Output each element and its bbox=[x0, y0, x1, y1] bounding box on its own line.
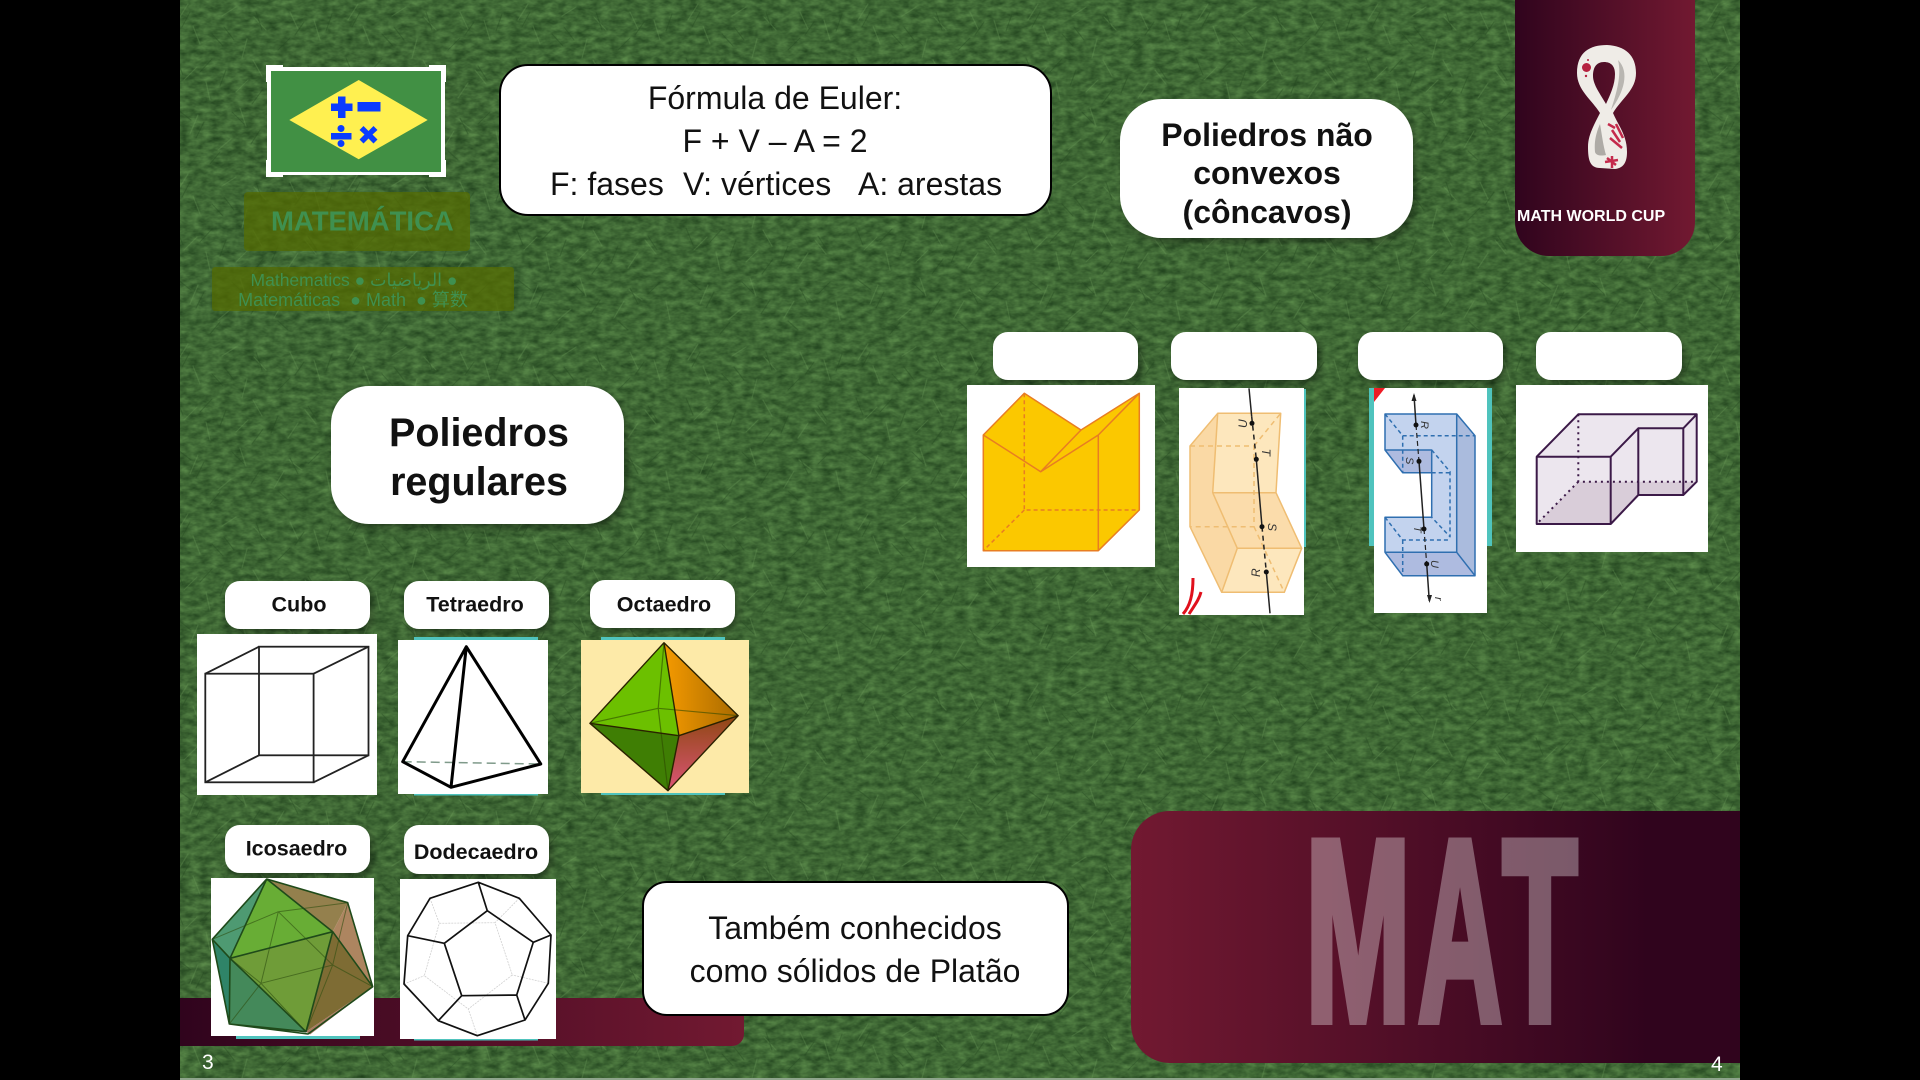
subject title bbox=[244, 192, 470, 251]
label: tetraedro bbox=[404, 581, 549, 629]
world cup panel bbox=[1515, 0, 1695, 256]
subject translations: Mathematics ● الرياضيات ● bbox=[251, 270, 457, 290]
page number 3: 3 bbox=[202, 1051, 214, 1074]
image: purple concave prism bbox=[1516, 385, 1708, 552]
label: cubo bbox=[225, 581, 370, 629]
MAT watermark bbox=[1305, 786, 1577, 1076]
flag icon bbox=[266, 65, 446, 177]
icon: figure eight logo bbox=[1577, 45, 1636, 169]
panel caption: MATH WORLD CUP bbox=[1517, 208, 1665, 225]
image: blue concave prism: T bbox=[1411, 526, 1423, 534]
page number 4: 4 bbox=[1711, 1053, 1723, 1076]
heading: regular polyhedra: regulares bbox=[390, 460, 568, 504]
subject translations bbox=[212, 267, 514, 311]
heading: non convex polyhedra bbox=[1120, 99, 1413, 238]
label: octaedro bbox=[590, 580, 735, 628]
image: orange concave prism: R bbox=[1249, 568, 1263, 577]
euler formula box: Fórmula de Euler: bbox=[648, 80, 902, 116]
euler formula box: F: fases bbox=[550, 166, 664, 202]
subject title: MATEMÁTICA bbox=[271, 206, 454, 236]
label: icosaedro: Icosaedro bbox=[246, 836, 347, 860]
image: orange concave prism: S bbox=[1265, 523, 1279, 531]
MAT panel bbox=[1131, 786, 1740, 1076]
image: blue concave prism bbox=[1369, 388, 1492, 613]
euler formula box: A: arestas bbox=[858, 166, 1002, 202]
image: orange concave prism bbox=[1179, 388, 1306, 615]
subject translations: Matemáticas ● Math ● 算数 bbox=[238, 290, 468, 310]
empty label pill 2 bbox=[1171, 332, 1317, 380]
image: octahedron bbox=[581, 637, 749, 795]
euler formula box bbox=[500, 65, 1051, 215]
label: octaedro: Octaedro bbox=[617, 592, 711, 616]
image: blue concave prism: U bbox=[1428, 560, 1440, 568]
image: blue concave prism: r bbox=[1432, 597, 1444, 602]
image: cube bbox=[197, 634, 377, 795]
empty label pill 1 bbox=[993, 332, 1138, 380]
platonic solids note: como sólidos de Platão bbox=[690, 953, 1020, 989]
image: dodecahedron bbox=[400, 879, 556, 1040]
euler formula box: F + V – A = 2 bbox=[682, 123, 868, 159]
label: dodecaedro: Dodecaedro bbox=[414, 840, 538, 864]
image: icosahedron bbox=[211, 878, 374, 1039]
heading: non convex polyhedra: Poliedros não bbox=[1161, 117, 1373, 153]
image: orange concave prism: T bbox=[1259, 449, 1273, 458]
label: icosaedro bbox=[225, 825, 370, 873]
empty label pill 3 bbox=[1358, 332, 1503, 380]
MAT watermark: M bbox=[1305, 788, 1411, 1076]
platonic solids note: Também conhecidos bbox=[708, 910, 1002, 946]
heading: regular polyhedra bbox=[331, 386, 624, 524]
heading: non convex polyhedra: convexos bbox=[1193, 155, 1341, 191]
euler formula box: V: vértices bbox=[683, 166, 831, 202]
image: blue concave prism: R bbox=[1418, 421, 1430, 429]
label: dodecaedro bbox=[404, 825, 549, 874]
label: cubo: Cubo bbox=[272, 592, 326, 616]
MAT watermark: A bbox=[1418, 788, 1502, 1075]
heading: regular polyhedra: Poliedros bbox=[389, 411, 569, 455]
MAT watermark: T bbox=[1503, 786, 1577, 1075]
image: blue concave prism: S bbox=[1403, 457, 1415, 465]
heading: non convex polyhedra: (côncavos) bbox=[1183, 194, 1351, 230]
bottom left wine bar bbox=[180, 998, 744, 1046]
image: tetrahedron bbox=[398, 637, 548, 796]
label: tetraedro: Tetraedro bbox=[426, 592, 524, 616]
image: orange concave prism: U bbox=[1236, 419, 1250, 428]
platonic solids note bbox=[643, 882, 1068, 1015]
image: yellow concave prism bbox=[967, 385, 1155, 567]
empty label pill 4 bbox=[1536, 332, 1682, 380]
